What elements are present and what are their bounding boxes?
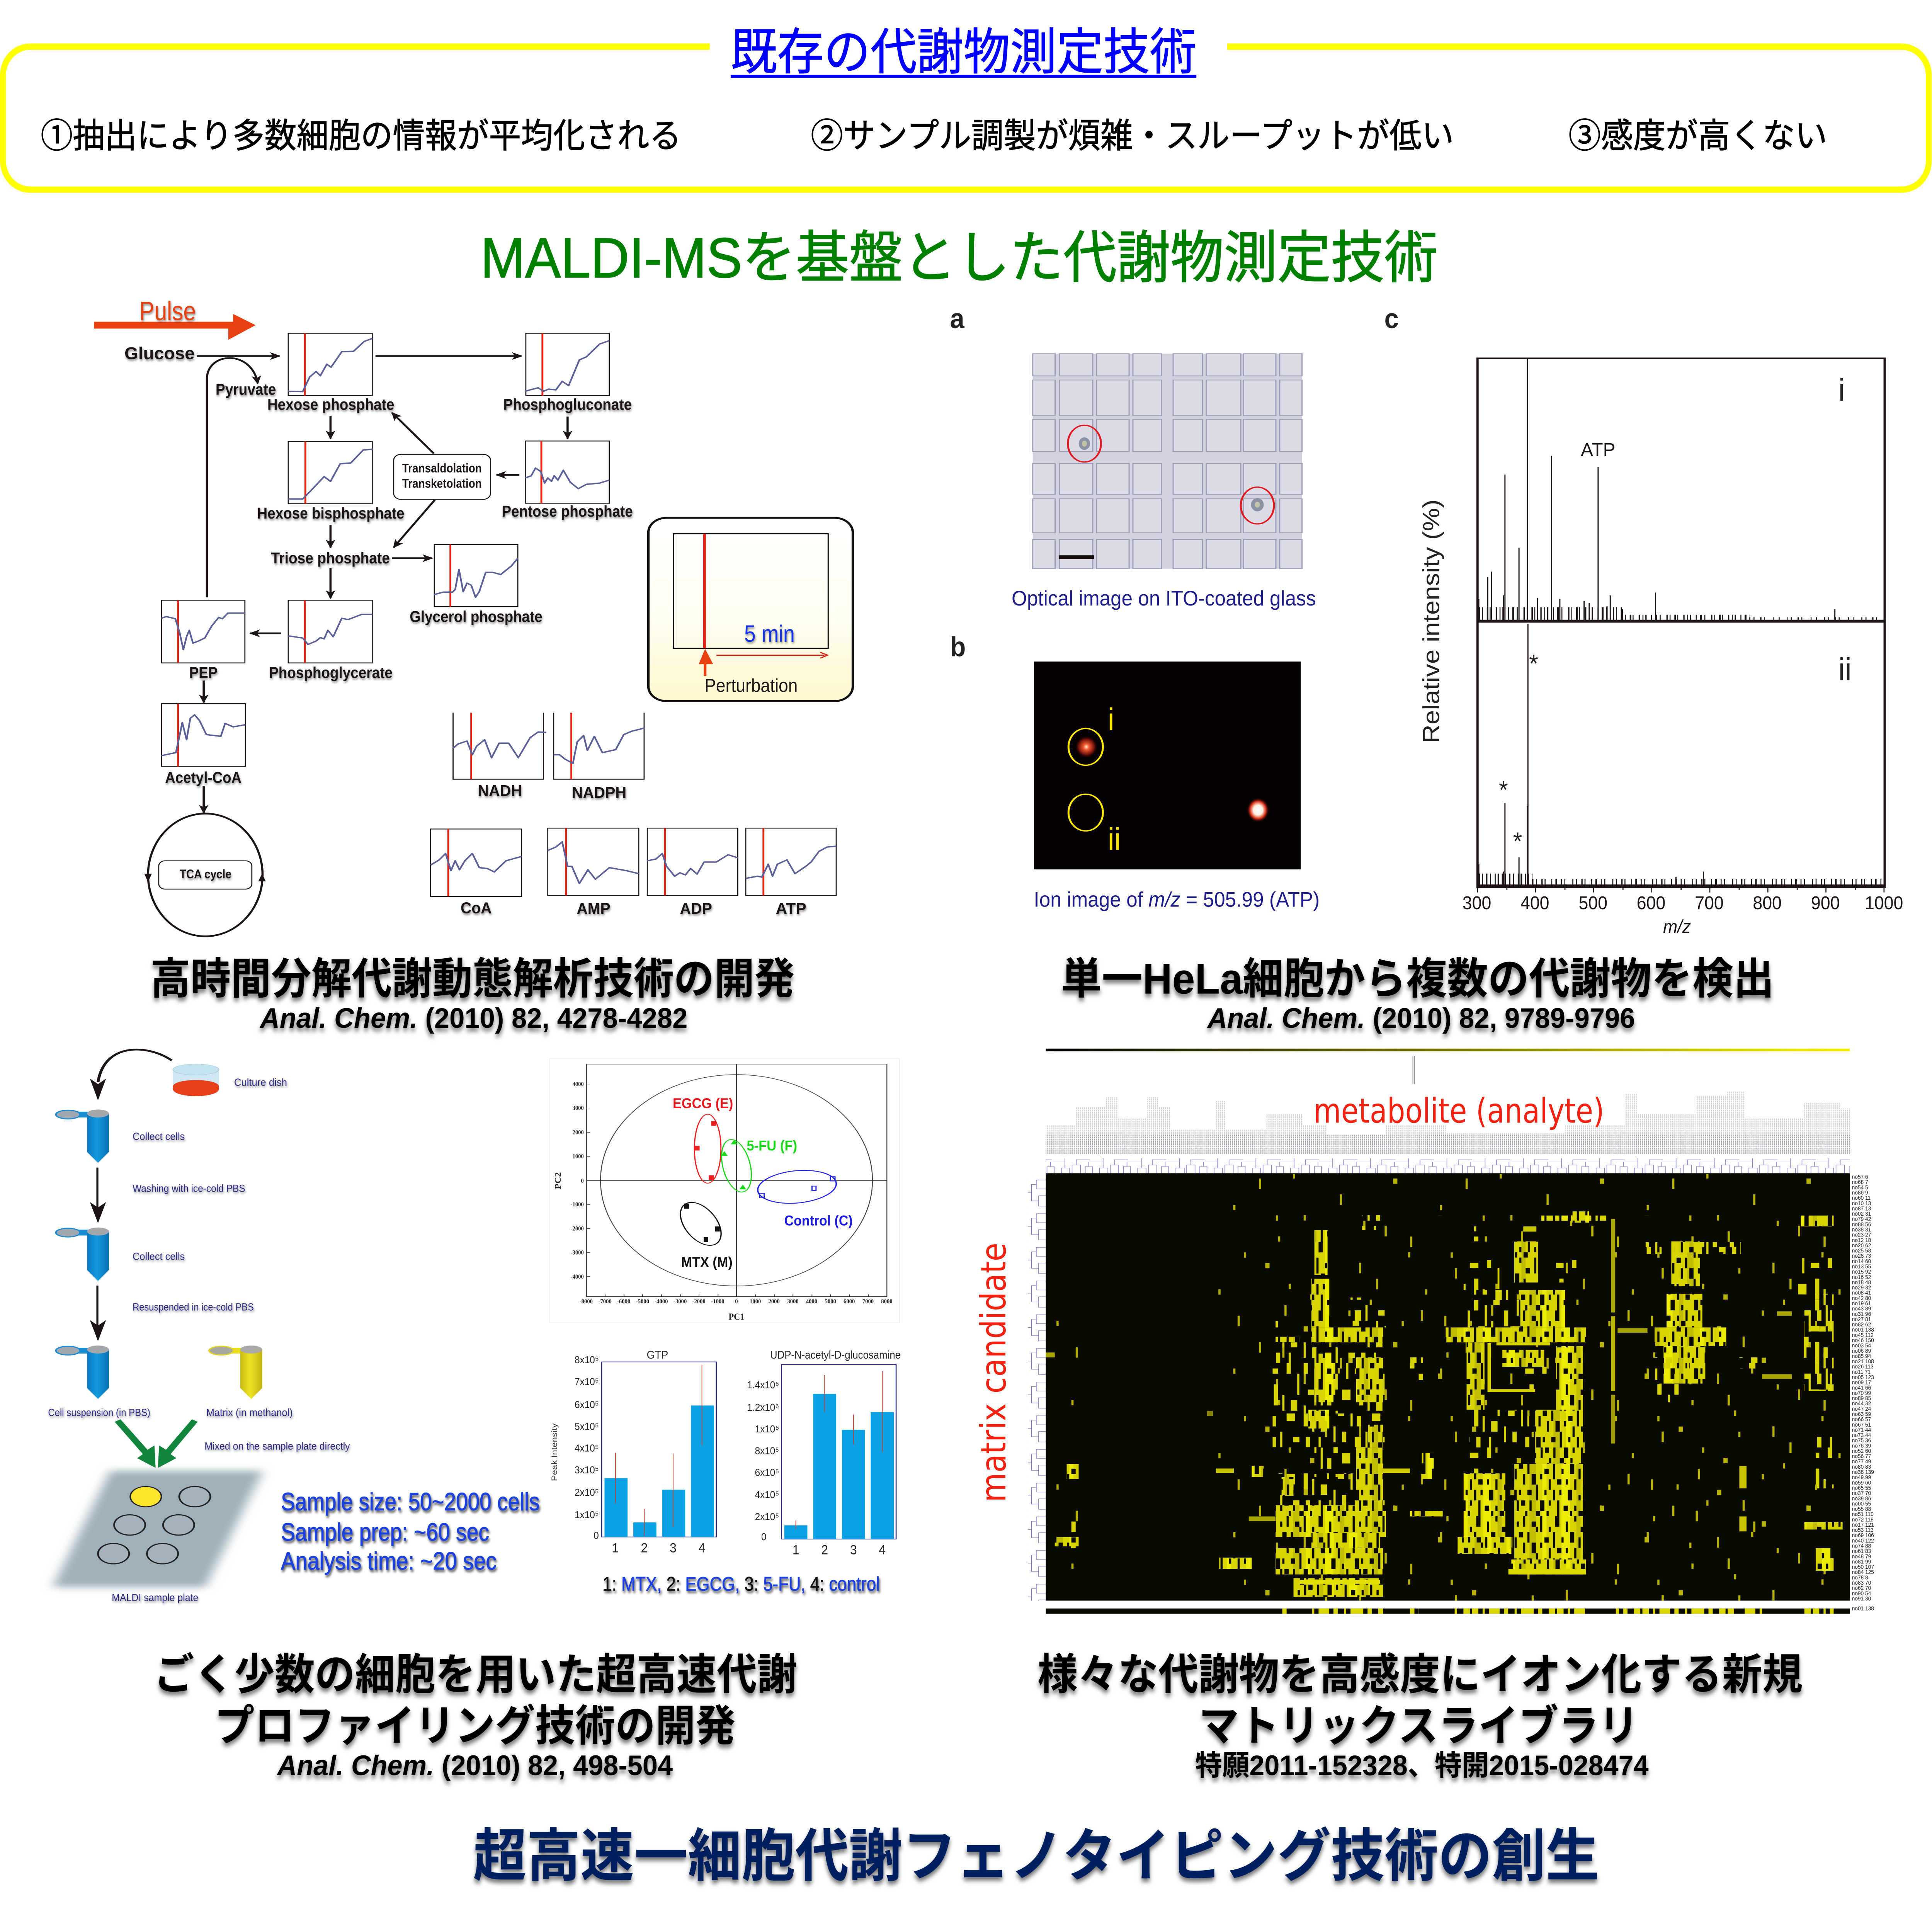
row labels: no28 73: [1852, 1253, 1871, 1259]
green arrows: [115, 1419, 198, 1468]
row labels: no65 55: [1852, 1485, 1871, 1492]
pathway labels: NADH: [478, 782, 522, 799]
tube: collect cells 2: [56, 1228, 109, 1281]
row labels: no45 112: [1852, 1332, 1874, 1338]
row labels: no44 32: [1852, 1401, 1871, 1407]
spectrum labels: 400: [1520, 893, 1549, 913]
row labels: no85 94: [1852, 1353, 1871, 1360]
spectrum labels: 900: [1811, 893, 1840, 913]
pathway graphics: [94, 314, 853, 936]
row labels: no60 11: [1852, 1195, 1871, 1201]
PCA labels: -8000: [580, 1298, 593, 1305]
row labels: no13 55: [1852, 1264, 1871, 1270]
heading: high time resolution: [150, 954, 795, 1034]
spectrum and images: [1033, 354, 1884, 893]
row labels: no50 107: [1852, 1564, 1874, 1570]
PCA labels: 1000: [573, 1153, 584, 1160]
row labels: no18 48: [1852, 1279, 1871, 1286]
label: metabolite (analyte): metabolite (analyte): [1313, 1091, 1604, 1131]
spectrum labels: 500: [1579, 893, 1607, 913]
bar chart labels: [550, 1349, 901, 1557]
row labels: no08 41: [1852, 1290, 1871, 1296]
bar chart labels: 4x10⁵: [575, 1443, 599, 1454]
row labels: no39 86: [1852, 1495, 1871, 1502]
row labels: no82 62: [1852, 1321, 1871, 1328]
bar chart labels: 1x10⁵: [575, 1509, 599, 1520]
PCA labels: 5-FU (F): [747, 1137, 797, 1154]
heading: new matrix library: 様々な代謝物を高感度にイオン化する新規: [1037, 1651, 1803, 1699]
row labels: no03 54: [1852, 1343, 1871, 1349]
bar chart labels: 1: [612, 1540, 619, 1555]
row labels: no69 106: [1852, 1532, 1874, 1539]
heading: single HeLa cell: 単一HeLa細胞から複数の代謝物を検出: [1061, 954, 1774, 1003]
row labels: no89 85: [1852, 1395, 1871, 1402]
box labels: Transaldolation: [402, 461, 482, 475]
citation: Anal. Chem. (2010) 82, 9789-9796: [1207, 1003, 1635, 1034]
row labels: no43 89: [1852, 1306, 1871, 1312]
sample plate: [53, 1471, 263, 1587]
bar chart labels: 0: [761, 1531, 766, 1543]
pathway labels: TCA cycle: [180, 867, 231, 881]
row labels: no74 88: [1852, 1543, 1871, 1549]
row labels: no38 31: [1852, 1227, 1871, 1233]
panel: matrix library heatmap: [973, 1049, 1874, 1614]
bar chart labels: 6x10⁵: [755, 1467, 779, 1478]
box labels: Transketolation: [402, 476, 482, 490]
row labels: no23 27: [1852, 1232, 1871, 1238]
inset text: 5 min: 5 min: [744, 620, 795, 647]
row labels: no67 51: [1852, 1422, 1871, 1428]
bar chart labels: GTP: [647, 1349, 668, 1361]
row labels: no25 58: [1852, 1248, 1871, 1254]
sample specs: Sample size: 50~2000 cells: [281, 1488, 540, 1516]
panel letters: [950, 303, 1399, 662]
caption: ion image: Ion image of m/z = 505.99 (ATP): [1034, 888, 1320, 912]
row labels: no05 123: [1852, 1374, 1874, 1381]
citation: Anal. Chem. (2010) 82, 4278-4282: [259, 1003, 687, 1034]
text: limitation 1: ①抽出により多数細胞の情報が平均化される: [41, 117, 681, 155]
PCA plot: [550, 1059, 900, 1323]
pathway labels: Acetyl-CoA: [165, 769, 242, 786]
inset text: perturbation: Perturbation: [704, 675, 798, 696]
bar chart labels: 6x10⁵: [575, 1399, 599, 1410]
row labels: no83 70: [1852, 1580, 1871, 1586]
row labels: no41 66: [1852, 1385, 1871, 1391]
spectrum labels: 1000: [1865, 893, 1903, 913]
mass spectrum: [1478, 358, 1884, 893]
pathway labels: ATP: [776, 900, 806, 917]
arrows between steps: [97, 1049, 172, 1331]
row labels: no29 32: [1852, 1285, 1871, 1291]
pathway labels: Pentose phosphate: [502, 503, 633, 520]
bar chart labels: 1.4x10⁶: [747, 1379, 779, 1391]
PCA labels: -4000: [571, 1273, 584, 1280]
citation: Anal. Chem. (2010) 82, 498-504: [276, 1750, 673, 1781]
bar chart labels: 2: [821, 1543, 828, 1557]
row labels: no26 113: [1852, 1364, 1874, 1370]
bar chart labels: 1x10⁶: [755, 1423, 779, 1435]
heading: ultra fast profiling: [154, 1651, 797, 1781]
row labels: no78 8: [1852, 1575, 1868, 1581]
heatmap cells: [1046, 1173, 1850, 1600]
arrow: pulse: [94, 314, 255, 340]
row labels: no02 31: [1852, 1211, 1871, 1217]
row labels: no62 70: [1852, 1585, 1871, 1592]
heading: single HeLa cell: [1061, 954, 1774, 1034]
row labels: no12 18: [1852, 1237, 1871, 1243]
panel: metabolic dynamics pathway: [94, 296, 853, 936]
row labels: no55 88: [1852, 1506, 1871, 1512]
row labels: no75 36: [1852, 1437, 1871, 1444]
pathway labels: Glycerol phosphate: [410, 608, 543, 626]
row labels: no19 61: [1852, 1301, 1871, 1307]
metabolite curves: [162, 338, 836, 884]
pathway labels: PEP: [189, 664, 218, 682]
PCA labels: 1000: [750, 1298, 761, 1305]
PCA labels: 7000: [862, 1298, 874, 1305]
bar chart labels: 4x10⁵: [755, 1489, 779, 1500]
pulse label: Pulse: [139, 296, 196, 326]
row labels: no49 99: [1852, 1475, 1871, 1481]
pathway labels: CoA: [461, 899, 492, 917]
bar chart labels: 8x10⁵: [575, 1354, 599, 1366]
sample specs: [281, 1488, 540, 1575]
row labels: no86 9: [1852, 1190, 1868, 1196]
spectrum labels: *: [1529, 650, 1538, 678]
PCA labels: 2000: [573, 1129, 584, 1136]
workflow labels: Collect cells: [133, 1130, 185, 1142]
pathway labels: [124, 344, 806, 917]
panel: ultra fast profiling workflow: [48, 1049, 901, 1604]
row labels: no46 150: [1852, 1337, 1874, 1344]
PCA labels: 0: [735, 1298, 738, 1305]
row labels: no70 99: [1852, 1390, 1871, 1396]
spectrum labels: *: [1513, 828, 1522, 855]
panel letters: b: [950, 631, 966, 662]
row labels: no27 81: [1852, 1316, 1871, 1323]
heading: existing metabolite measurement technology: 既存の代謝物測定技術: [731, 25, 1196, 80]
bar chart labels: 1.2x10⁶: [747, 1402, 779, 1413]
ion image labels: i: [1108, 701, 1114, 737]
bar chart labels: 8x10⁵: [755, 1446, 779, 1457]
pathway labels: AMP: [577, 900, 611, 917]
row labels: no66 57: [1852, 1417, 1871, 1423]
row labels: no54 5: [1852, 1184, 1868, 1191]
row labels: no00 55: [1852, 1501, 1871, 1507]
caption: optical image: Optical image on ITO-coated glass: [1012, 587, 1316, 610]
pathway labels: NADPH: [572, 784, 626, 801]
spectrum labels: *: [1499, 776, 1508, 804]
PCA labels: 5000: [825, 1298, 836, 1305]
heading: new matrix library: マトリックスライブラリ: [1199, 1702, 1639, 1750]
row labels: no20 62: [1852, 1243, 1871, 1249]
summary bar: [1046, 1609, 1850, 1614]
PCA labels: 3000: [787, 1298, 799, 1305]
bar chart legend: 1: MTX, 2: EGCG, 3: 5-FU, 4: control: [602, 1573, 880, 1595]
row labels: no21 108: [1852, 1359, 1874, 1365]
bar chart labels: 3x10⁵: [575, 1464, 599, 1476]
spectrum labels: 300: [1463, 893, 1491, 913]
row labels: no88 56: [1852, 1221, 1871, 1228]
workflow labels: [48, 1076, 350, 1604]
heading: ultra fast profiling: プロファイリング技術の開発: [214, 1702, 736, 1750]
row labels: no57 6: [1852, 1174, 1868, 1180]
row labels: no06 89: [1852, 1348, 1871, 1354]
bar chart labels: 2: [641, 1540, 648, 1555]
bar chart labels: UDP-N-acetyl-D-glucosamine: [770, 1349, 901, 1361]
TCA cycle: [144, 814, 266, 936]
workflow labels: Matrix (in methanol): [206, 1406, 293, 1418]
heading: MALDI-MS based technology: MALDI-MSを基盤とした代謝物測定技術: [481, 226, 1438, 290]
culture dish: [173, 1064, 219, 1096]
workflow labels: Mixed on the sample plate directly: [204, 1440, 350, 1452]
sample specs: Analysis time: ~20 sec: [281, 1547, 497, 1575]
text: limitation 3: ③感度が高くない: [1568, 117, 1827, 155]
heading: high time resolution: 高時間分解代謝動態解析技術の開発: [150, 954, 795, 1003]
tube: matrix: [209, 1345, 262, 1399]
heading: ultra fast profiling: ごく少数の細胞を用いた超高速代謝: [154, 1651, 797, 1699]
row dendrogram: [1028, 1178, 1046, 1600]
PCA labels: -1000: [571, 1201, 584, 1208]
row labels: no56 77: [1852, 1453, 1871, 1460]
gradient scale bar: [1046, 1049, 1850, 1051]
row labels: no01 138: [1852, 1605, 1874, 1612]
column dendrogram: [1046, 1155, 1850, 1173]
PCA labels: 8000: [881, 1298, 893, 1305]
pathway labels: Phosphogluconate: [503, 396, 632, 413]
PCA labels: 3000: [573, 1105, 584, 1112]
PCA labels: -1000: [711, 1298, 724, 1305]
footer heading: phenotyping technology: 超高速一細胞代謝フェノタイピング技術の創生: [473, 1824, 1599, 1888]
row labels: no81 99: [1852, 1559, 1871, 1565]
pathway labels: Phosphoglycerate: [269, 664, 393, 682]
heading: new matrix library: [1037, 1651, 1803, 1781]
PCA labels: -6000: [617, 1298, 631, 1305]
bar chart: GTP: [602, 1362, 716, 1537]
row labels: no47 24: [1852, 1406, 1871, 1412]
spectrum labels: 600: [1637, 893, 1665, 913]
row labels: no38 139: [1852, 1469, 1874, 1476]
bar chart labels: Peak Intensity: [550, 1423, 559, 1481]
bar chart labels: 4: [699, 1540, 706, 1555]
box labels: [402, 461, 482, 490]
panel letters: c: [1384, 303, 1399, 334]
pathway labels: Triose phosphate: [271, 549, 390, 567]
row labels: no80 83: [1852, 1464, 1871, 1470]
box: transaldolation: [394, 454, 490, 499]
spectrum labels: [1418, 372, 1903, 937]
optical image: [1033, 354, 1302, 569]
bar chart labels: 5x10⁵: [575, 1421, 599, 1432]
row labels: no11 71: [1852, 1369, 1871, 1375]
pathway arrows: [197, 356, 568, 813]
PCA labels: 2000: [769, 1298, 780, 1305]
text: limitation 2: ②サンプル調製が煩雑・スループットが低い: [811, 117, 1454, 155]
PCA labels: EGCG (E): [673, 1095, 733, 1111]
PCA labels: MTX (M): [681, 1254, 733, 1270]
bar chart labels: 2x10⁵: [755, 1511, 779, 1522]
bar chart labels: 7x10⁵: [575, 1376, 599, 1388]
row labels: no72 118: [1852, 1517, 1874, 1523]
panel: single HeLa cell detection: [950, 303, 1903, 937]
bar chart labels: 1: [793, 1543, 799, 1557]
row labels: no51 110: [1852, 1511, 1874, 1518]
row labels: no40 122: [1852, 1537, 1874, 1544]
row labels: no76 39: [1852, 1443, 1871, 1449]
spectrum labels: i: [1838, 372, 1845, 407]
PCA labels: -2000: [692, 1298, 706, 1305]
row labels: no15 92: [1852, 1269, 1871, 1275]
metabolite column labels: [1046, 1056, 1850, 1155]
workflow labels: Collect cells: [133, 1250, 185, 1262]
PCA labels: Control (C): [784, 1213, 853, 1229]
PCA labels: -2000: [571, 1225, 584, 1232]
perturbation markers: [178, 333, 764, 896]
PCA labels: -7000: [599, 1298, 612, 1305]
PCA labels: PC1: [728, 1311, 744, 1322]
spectrum labels: ATP: [1581, 439, 1615, 460]
patent numbers: 特願2011-152328、特開2015-028474: [1195, 1750, 1649, 1781]
tube: cell suspension: [56, 1345, 109, 1399]
row labels: no71 44: [1852, 1427, 1871, 1434]
row labels: no84 125: [1852, 1569, 1874, 1576]
row labels: no31 96: [1852, 1311, 1871, 1317]
row labels: no77 49: [1852, 1459, 1871, 1465]
row labels: no09 17: [1852, 1379, 1871, 1386]
bar chart labels: 0: [594, 1530, 599, 1541]
pathway labels: ADP: [680, 900, 712, 917]
PCA labels: 4000: [573, 1081, 584, 1088]
bar chart labels: 3: [850, 1543, 857, 1557]
ion image labels: [1108, 701, 1121, 857]
row labels: no37 70: [1852, 1490, 1871, 1497]
row labels: no61 83: [1852, 1548, 1871, 1554]
PCA labels: [553, 1081, 893, 1322]
row labels: no63 59: [1852, 1411, 1871, 1418]
row labels: no52 60: [1852, 1448, 1871, 1454]
pathway labels: Hexose phosphate: [267, 396, 394, 413]
PCA labels: -4000: [655, 1298, 668, 1305]
row labels: no53 113: [1852, 1527, 1874, 1534]
heatmap graphics: [1028, 1049, 1850, 1614]
row labels: no79 42: [1852, 1216, 1871, 1223]
pathway labels: Hexose bisphosphate: [257, 505, 405, 522]
pathway labels: Pyruvate: [216, 381, 276, 398]
ion image labels: ii: [1108, 821, 1121, 857]
panel letters: a: [950, 303, 964, 334]
workflow labels: Culture dish: [234, 1076, 287, 1088]
PCA labels: 6000: [844, 1298, 855, 1305]
bar chart labels: 2x10⁵: [575, 1487, 599, 1498]
label: matrix candidate: matrix candidate: [973, 1243, 1014, 1502]
row labels: no87 13: [1852, 1206, 1871, 1212]
workflow graphics: [53, 1049, 900, 1587]
spectrum labels: 800: [1753, 893, 1782, 913]
bar chart: UDP-N-acetyl-D-glucosamine: [781, 1364, 896, 1539]
row labels: no14 60: [1852, 1258, 1871, 1265]
bar chart labels: 4: [879, 1543, 886, 1557]
spectrum labels: ii: [1838, 651, 1852, 687]
row labels: no73 44: [1852, 1432, 1871, 1439]
row labels: no01 138: [1852, 1327, 1874, 1333]
tube: collect cells: [56, 1109, 109, 1163]
row labels: no59 60: [1852, 1480, 1871, 1486]
workflow labels: Cell suspension (in PBS): [48, 1406, 150, 1418]
workflow labels: MALDI sample plate: [112, 1592, 198, 1604]
ion image: [1034, 662, 1301, 869]
inset legend graphics: [648, 518, 853, 701]
row labels: no90 54: [1852, 1590, 1871, 1597]
row labels: no17 121: [1852, 1522, 1874, 1528]
row labels: no68 7: [1852, 1179, 1868, 1185]
PCA labels: -3000: [673, 1298, 687, 1305]
PCA labels: 0: [581, 1177, 584, 1184]
pathway labels: Glucose: [124, 344, 195, 363]
time course plots: [162, 333, 836, 896]
row labels: no42 80: [1852, 1295, 1871, 1302]
workflow labels: Washing with ice-cold PBS: [133, 1182, 245, 1194]
row labels: no91 30: [1852, 1596, 1871, 1602]
row labels: no48 79: [1852, 1553, 1871, 1560]
PCA labels: -3000: [571, 1249, 584, 1256]
workflow labels: Resuspended in ice-cold PBS: [133, 1301, 254, 1313]
PCA labels: 4000: [806, 1298, 818, 1305]
row labels: no16 52: [1852, 1274, 1871, 1281]
PCA labels: -5000: [636, 1298, 649, 1305]
sample specs: Sample prep: ~60 sec: [281, 1518, 489, 1546]
PCA labels: PC2: [553, 1172, 563, 1189]
spectrum labels: Relative intensity (%): [1418, 500, 1444, 743]
bar chart labels: 3: [670, 1540, 677, 1555]
spectrum labels: 700: [1695, 893, 1724, 913]
spectrum labels: m/z: [1663, 916, 1691, 937]
panel: existing technology box: [3, 25, 1929, 190]
row labels: no10 13: [1852, 1200, 1871, 1207]
